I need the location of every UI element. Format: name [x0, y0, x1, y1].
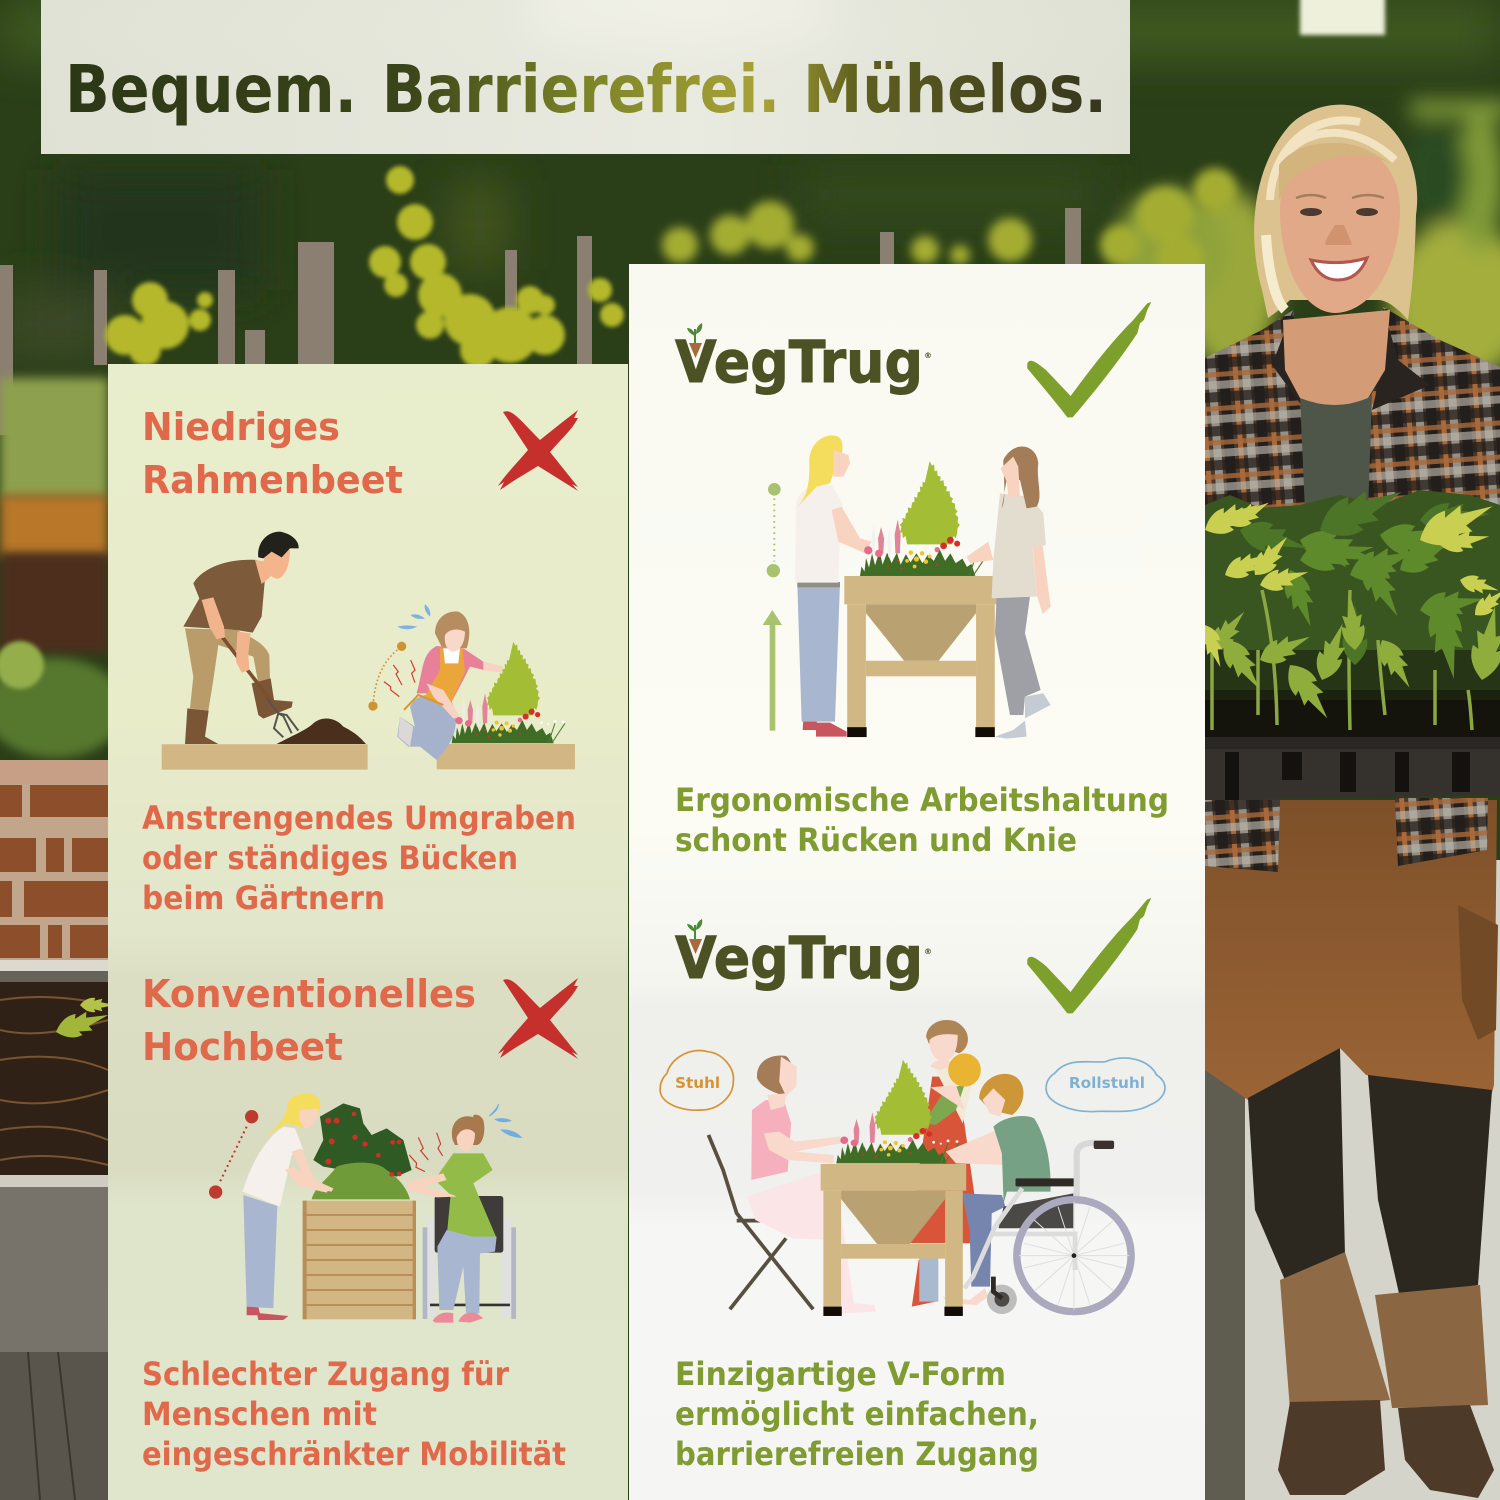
- background behind woman: [1115, 100, 1500, 380]
- bubble: Stuhl: [660, 1050, 733, 1110]
- icon: green check 2: [1027, 898, 1151, 1013]
- yellow-green foliage clusters: [105, 166, 624, 368]
- plaid shirt: [1205, 307, 1500, 512]
- text: V-shape benefit: [675, 1355, 1039, 1473]
- title: Bequem.: [65, 51, 357, 128]
- bubble: Rollstuhl: [1046, 1058, 1165, 1112]
- VegTrug logo 1: VegTrug: [675, 328, 923, 396]
- text: low bed drawback: [142, 799, 576, 917]
- text: raised bed drawback: Menschen mit: [142, 1395, 377, 1433]
- heading: Niedriges Rahmenbeet: Rahmenbeet: [142, 458, 403, 502]
- VegTrug logo 1: ®: [924, 351, 932, 360]
- panel: VegTrug: [629, 264, 1205, 1500]
- icon: green check 1: [1027, 302, 1151, 417]
- text: V-shape benefit: Einzigartige V-Form: [675, 1355, 1006, 1393]
- shirt tails: [1205, 798, 1488, 872]
- bubble: Stuhl: Stuhl: [675, 1075, 720, 1092]
- header band: [41, 0, 1130, 154]
- text: raised bed drawback: [142, 1355, 566, 1473]
- hair back and head: [1254, 105, 1417, 320]
- icon: red cross 2: [498, 978, 578, 1059]
- heading: Konventionelles Hochbeet: [142, 972, 476, 1069]
- fence posts: [0, 208, 1081, 435]
- illustration: chair and wheelchair access: [660, 1020, 1165, 1316]
- bubble: Rollstuhl: Rollstuhl: [1069, 1075, 1145, 1092]
- illustration: raised bed: [209, 1093, 521, 1323]
- VegTrug logo 2: ®: [924, 947, 932, 956]
- heading: Konventionelles Hochbeet: Konventionelles: [142, 972, 476, 1016]
- illustration: ergonomic posture: [763, 435, 1051, 739]
- black tray: [1205, 737, 1500, 800]
- title: Barrierefrei.: [382, 51, 780, 128]
- illustration: low bed: [162, 532, 575, 770]
- heading: Konventionelles Hochbeet: Hochbeet: [142, 1025, 343, 1069]
- VegTrug logo 2: VegTrug: [675, 924, 923, 992]
- text: low bed drawback: oder ständiges Bücken: [142, 839, 518, 877]
- left strip: grass, bushes, brick, soil, wood: [0, 378, 108, 498]
- text: raised bed drawback: eingeschränkter Mobilität: [142, 1435, 566, 1473]
- text: ergonomic benefit: Ergonomische Arbeitshaltung: [675, 781, 1169, 819]
- title: Mühelos.: [803, 51, 1107, 128]
- seedling tray plants: [1196, 475, 1500, 737]
- text: low bed drawback: beim Gärtnern: [142, 879, 385, 917]
- title: [65, 51, 1107, 128]
- text: ergonomic benefit: [675, 781, 1169, 859]
- heading: Niedriges Rahmenbeet: [142, 405, 403, 502]
- panel: conventional beds: [108, 364, 628, 1500]
- woman holding seedling tray: [1196, 105, 1500, 1500]
- text: V-shape benefit: barrierefreien Zugang: [675, 1435, 1039, 1473]
- text: ergonomic benefit: schont Rücken und Knie: [675, 821, 1077, 859]
- heading: Niedriges Rahmenbeet: Niedriges: [142, 405, 340, 449]
- text: V-shape benefit: ermöglicht einfachen,: [675, 1395, 1039, 1433]
- text: low bed drawback: Anstrengendes Umgraben: [142, 799, 576, 837]
- text: raised bed drawback: Schlechter Zugang für: [142, 1355, 509, 1393]
- icon: red cross 1: [498, 410, 578, 491]
